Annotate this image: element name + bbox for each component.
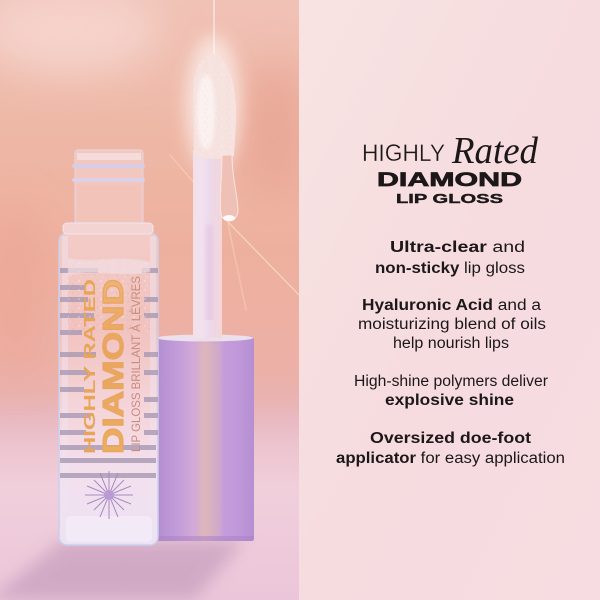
text block: hyaluronic acid: help nourish lips xyxy=(393,335,509,352)
text block: ultra-clear: Ultra-clear and xyxy=(390,239,525,256)
text block: ultra-clear xyxy=(375,239,525,277)
label text: HIGHLY RATED: HIGHLY RATED xyxy=(82,279,99,454)
heading script: Rated: Rated xyxy=(451,130,539,172)
label stripes xyxy=(60,268,158,478)
text block: applicator: applicator for easy application xyxy=(336,450,565,467)
heading line: DIAMOND: DIAMOND xyxy=(377,170,522,191)
icon: starburst on label xyxy=(85,471,133,519)
heading line: LIP GLOSS: LIP GLOSS xyxy=(396,191,504,206)
shadow on floor xyxy=(0,540,245,600)
label text: DIAMOND: DIAMOND xyxy=(98,279,130,454)
cap xyxy=(157,320,254,541)
background: photo scene xyxy=(0,0,330,600)
text block: applicator xyxy=(336,430,565,467)
text block: high-shine: High-shine polymers deliver xyxy=(354,373,548,390)
bottle body xyxy=(59,223,158,545)
panel: right text background xyxy=(299,0,600,600)
text block: ultra-clear: non-sticky lip gloss xyxy=(375,260,525,277)
text block: high-shine xyxy=(354,373,548,409)
text block: high-shine: explosive shine xyxy=(385,392,514,409)
heading line: HIGHLY: HIGHLY xyxy=(362,140,445,167)
gloss glitter xyxy=(68,258,150,335)
applicator with gloss xyxy=(193,54,238,221)
text block: hyaluronic acid xyxy=(358,297,546,352)
bottle neck xyxy=(72,150,145,225)
heading xyxy=(362,130,539,206)
wand stem xyxy=(193,150,222,320)
label text: small print: LIP GLOSS BRILLANT À LÈVRES xyxy=(128,276,143,452)
text block: hyaluronic acid: moisturizing blend of oils xyxy=(358,316,546,333)
light rays xyxy=(170,0,299,310)
text block: applicator: Oversized doe-foot xyxy=(370,430,531,447)
text block: hyaluronic acid: Hyaluronic Acid and a xyxy=(362,297,541,314)
